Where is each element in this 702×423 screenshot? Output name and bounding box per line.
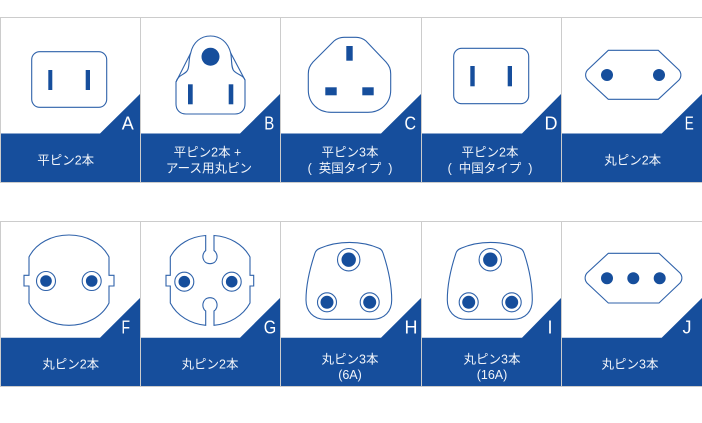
letter F: F (121, 318, 130, 338)
panel: plug J (562, 222, 702, 386)
caption I: (16A) (477, 368, 507, 382)
caption H: 丸ピン3本 (322, 352, 379, 366)
caption band C (281, 94, 421, 182)
icon: plug A flat 2 pin (32, 52, 107, 107)
icon: plug E round 2 pin (586, 50, 681, 99)
caption B: 平ピン2本 + (174, 146, 241, 160)
panel: plug E (562, 18, 702, 182)
letter B: B (264, 114, 274, 134)
caption C (308, 146, 392, 176)
panel: plug B (140, 18, 280, 182)
caption B (166, 146, 252, 176)
caption band F (1, 298, 140, 386)
icon: plug B flat 2 pin with earth (176, 36, 245, 114)
caption band A (1, 94, 140, 182)
caption band G (141, 298, 280, 386)
icon: plug J round 3 pin (585, 253, 682, 303)
caption D: ( 中国タイプ ) (448, 160, 532, 176)
letter I: I (547, 318, 553, 338)
caption B: アース用丸ピン (166, 162, 252, 176)
caption J: 丸ピン3本 (602, 358, 659, 372)
icon: plug G round 2 pin with notches (166, 236, 254, 325)
caption I (464, 352, 521, 382)
icon: plug C British 3 pin (308, 37, 391, 112)
caption E: 丸ピン2本 (604, 154, 662, 168)
panel: plug G (140, 222, 280, 386)
caption band H (281, 298, 421, 386)
panel: plug A (0, 18, 140, 182)
caption F: 丸ピン2本 (42, 358, 100, 372)
panel: plug F (0, 222, 140, 386)
letter G: G (264, 318, 276, 338)
panel: plug H (280, 222, 422, 386)
caption C: 平ピン3本 (322, 146, 379, 160)
icon: plug F round 2 pin (24, 235, 114, 325)
letter H: H (404, 318, 418, 338)
caption D: 平ピン2本 (462, 146, 519, 160)
letter C: C (405, 114, 416, 134)
caption I: 丸ピン3本 (464, 352, 521, 366)
caption D (448, 146, 532, 176)
letter E: E (685, 114, 694, 134)
caption A: 平ピン2本 (37, 154, 95, 168)
caption band E (562, 94, 702, 182)
caption H (322, 352, 379, 382)
caption C: ( 英国タイプ ) (308, 162, 392, 176)
caption band B (141, 94, 280, 182)
icon: plug I round 3 pin 16A (447, 242, 532, 319)
letter A: A (122, 114, 134, 134)
caption H: (6A) (338, 368, 362, 382)
panel: plug D (422, 18, 562, 182)
icon: plug D Chinese flat 2 pin (454, 48, 529, 104)
icon: plug H round 3 pin 6A (306, 242, 392, 319)
panel: plug C (280, 18, 422, 182)
letter J: J (682, 318, 692, 338)
caption G: 丸ピン2本 (182, 358, 239, 372)
panel: plug I (422, 222, 562, 386)
letter D: D (544, 114, 558, 134)
caption band I (422, 298, 561, 386)
caption band J (562, 298, 702, 386)
caption band D (422, 94, 561, 182)
